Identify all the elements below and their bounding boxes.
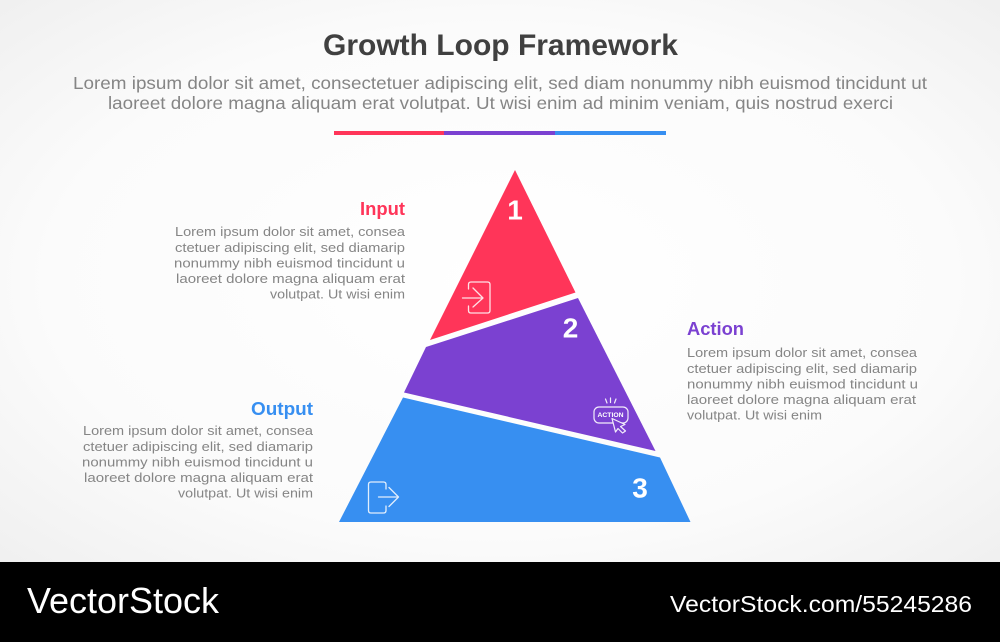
subtitle text block: laoreet dolore magna aliquam erat volutpat. Ut wisi enim ad minim veniam, quis nostrud exerci [108,93,893,113]
pyramid segment 3: output [339,398,690,522]
panel: action text: volutpat. Ut wisi enim [687,408,822,422]
panel: input text: Lorem ipsum dolor sit amet, consea [175,224,406,239]
tri-colour divider [334,131,666,135]
icon: action button with cursor: ACTION [597,412,624,419]
panel: action text [687,319,918,422]
panel: action text: nonummy nibh euismod tincidunt u [687,376,918,392]
footer url: VectorStock.com/55245286 [670,591,972,617]
panel: input text: volutpat. Ut wisi enim [270,286,405,302]
panel: output text: Lorem ipsum dolor sit amet, consea [83,423,314,438]
panel: output text: nonummy nibh euismod tincidunt u [82,454,313,470]
panel: input text: nonummy nibh euismod tincidunt u [174,256,405,270]
title: Growth Loop Framework [323,29,678,62]
pyramid segment 1: input [430,170,576,340]
footer logo: VectorStock [27,580,220,621]
panel: output text [82,399,314,500]
panel: output text: volutpat. Ut wisi enim [178,486,313,500]
subtitle text block [73,73,927,113]
heading: input: Input [360,199,405,219]
panel: action text: Lorem ipsum dolor sit amet, consea [687,345,918,360]
heading: action: Action [687,319,744,339]
panel: input text: ctetuer adipiscing elit, sed diamarip [175,240,405,255]
pyramid segment 2: action [404,298,656,451]
panel: input text: laoreet dolore magna aliquam erat [176,271,405,286]
panel: input text [174,199,406,302]
icon: exit door [368,482,398,513]
subtitle text block: Lorem ipsum dolor sit amet, consectetuer adipiscing elit, sed diam nonummy nibh euismod tincidunt ut [73,73,927,93]
heading: output: Output [251,399,313,419]
panel: action text: ctetuer adipiscing elit, sed diamarip [687,361,917,376]
footer bar [0,562,1000,642]
number 2: 2 [563,312,578,344]
panel: output text: laoreet dolore magna aliquam erat [84,470,313,485]
panel: action text: laoreet dolore magna aliquam erat [687,392,916,407]
number 3: 3 [632,472,648,504]
icon: enter door [462,282,490,313]
number 1: 1 [507,194,523,226]
panel: output text: ctetuer adipiscing elit, sed diamarip [83,439,313,454]
icon: action button with cursor [594,398,628,433]
